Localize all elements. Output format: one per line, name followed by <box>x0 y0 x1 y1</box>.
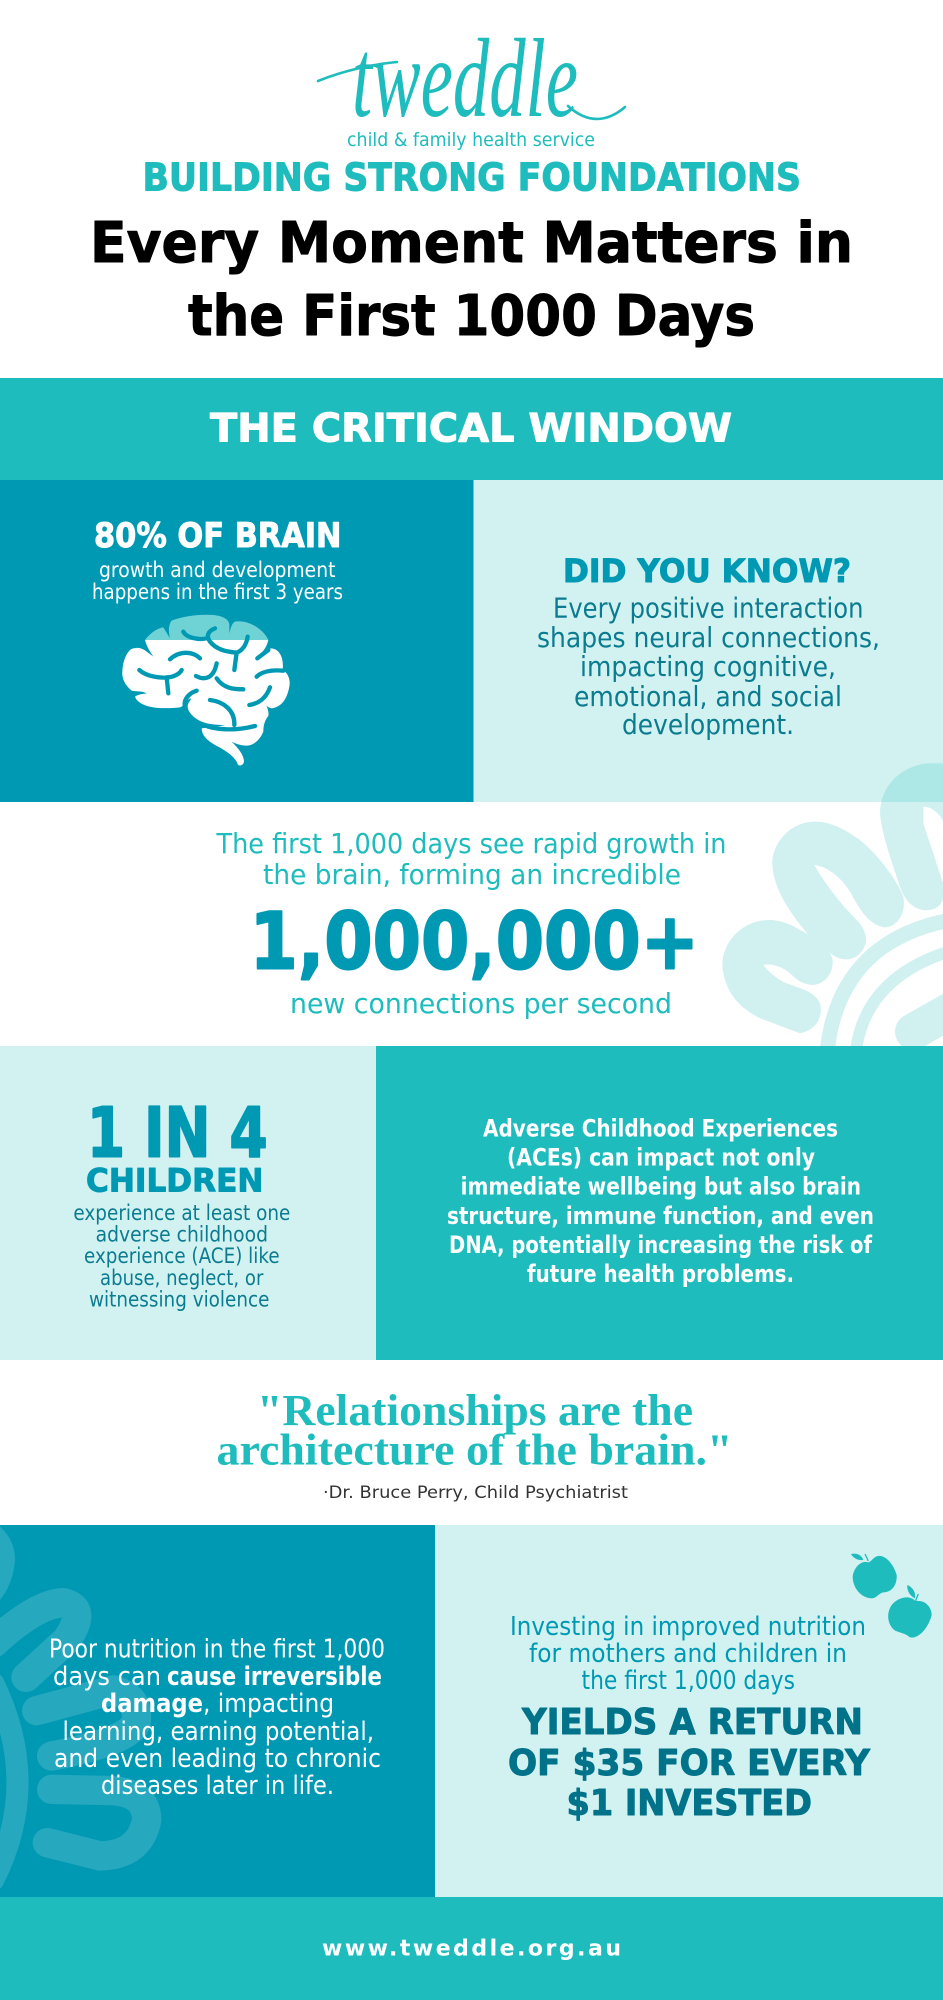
text: poor nutrition: days can <box>53 1662 161 1692</box>
heading: children: CHILDREN <box>86 1162 263 1200</box>
text: neural connections: impacting cognitive, <box>580 650 836 683</box>
icon: apples <box>851 1554 932 1638</box>
footer: www.tweddle.org.au <box>322 1937 621 1962</box>
panel: did you know <box>474 480 943 802</box>
stat: 1 in 4: 1 IN 4 <box>87 1094 268 1174</box>
quote attribution: ·Dr. Bruce Perry, Child Psychiatrist <box>323 1483 628 1503</box>
panel: return on investment <box>435 1525 943 1897</box>
decorative motif: bottom left <box>0 1527 147 1880</box>
logo <box>318 17 625 151</box>
text: neural connections: emotional, and social <box>574 680 842 713</box>
panel: adverse childhood experiences <box>376 1046 943 1360</box>
section banner: the critical window: THE CRITICAL WINDOW <box>210 406 732 452</box>
text: investing in nutrition: for mothers and children in <box>529 1639 847 1669</box>
text: ACEs impact: Adverse Childhood Experiences <box>483 1115 838 1143</box>
text: poor nutrition: Poor nutrition in the first 1,000 <box>49 1635 385 1665</box>
icon: brain <box>122 615 290 765</box>
stat: return on investment: OF $35 FOR EVERY <box>508 1743 871 1784</box>
text: adverse experience <box>73 1201 290 1312</box>
stat: return on investment: YIELDS A RETURN <box>521 1702 863 1743</box>
title: Every Moment Matters in <box>90 211 853 276</box>
text: rapid growth: The first 1,000 days see rapid growth in <box>216 827 727 860</box>
text: rapid growth: the brain, forming an incredible <box>263 858 681 891</box>
text: poor nutrition: and even leading to chronic <box>54 1744 381 1774</box>
text: brain growth <box>92 558 343 604</box>
text: adverse experience: experience at least one <box>73 1201 290 1225</box>
text: adverse experience: abuse, neglect, or <box>100 1266 264 1290</box>
text: poor nutrition: damage <box>101 1689 203 1719</box>
panel: 1 in 4 children <box>0 1046 376 1360</box>
footer <box>0 1897 943 2000</box>
stat block: 1,000,000+ connections <box>216 827 727 1020</box>
logo: child & family health service <box>347 129 595 151</box>
heading: 80% of brain: 80% OF BRAIN <box>94 516 342 556</box>
text: poor nutrition: diseases later in life. <box>101 1771 334 1801</box>
decorative motif: top right <box>722 763 943 1050</box>
text: ACEs impact: (ACEs) can impact not only <box>507 1144 815 1172</box>
header <box>0 0 943 378</box>
text: adverse experience: witnessing violence <box>89 1288 269 1312</box>
title <box>90 211 853 349</box>
quote <box>216 1386 732 1503</box>
text: poor nutrition <box>49 1635 385 1801</box>
text: poor nutrition: cause irreversible <box>167 1662 382 1692</box>
panel: poor nutrition <box>0 1525 435 1897</box>
text: brain growth: growth and development <box>99 558 336 582</box>
stat: return on investment <box>508 1702 871 1824</box>
title: the First 1000 Days <box>188 284 755 349</box>
text: investing in nutrition <box>510 1612 866 1696</box>
quote text: "Relationships are the <box>257 1386 693 1435</box>
text: investing in nutrition: Investing in improved nutrition <box>510 1612 866 1642</box>
panel: 80% of brain <box>0 480 474 802</box>
text: adverse experience: experience (ACE) like <box>84 1244 280 1268</box>
text: investing in nutrition: the first 1,000 days <box>582 1666 795 1696</box>
text: neural connections <box>537 592 880 741</box>
section banner: the critical window <box>0 378 943 480</box>
text: ACEs impact: future health problems. <box>527 1260 794 1288</box>
text: poor nutrition: learning, earning potential, <box>62 1717 374 1747</box>
text: neural connections: development. <box>622 708 794 741</box>
text: adverse experience: adverse childhood <box>96 1223 268 1247</box>
quote text <box>216 1386 732 1474</box>
number: 1,000,000+: 1,000,000+ <box>250 898 699 988</box>
stat: return on investment: $1 INVESTED <box>566 1783 812 1824</box>
text: neural connections: shapes neural connections, <box>537 621 880 654</box>
text: poor nutrition: , impacting <box>203 1689 334 1719</box>
text: brain growth: happens in the first 3 years <box>92 580 343 604</box>
logo: tweddle <box>352 17 578 141</box>
text: connections per second: new connections per second <box>290 987 672 1020</box>
text: rapid growth <box>216 827 727 891</box>
text: neural connections: Every positive interaction <box>553 592 864 624</box>
heading: did you know: DID YOU KNOW? <box>563 552 851 590</box>
text: ACEs impact <box>447 1115 874 1288</box>
quote text: architecture of the brain." <box>216 1425 732 1474</box>
text: ACEs impact: immediate wellbeing but also brain <box>461 1173 861 1201</box>
subtitle: BUILDING STRONG FOUNDATIONS <box>142 156 801 200</box>
